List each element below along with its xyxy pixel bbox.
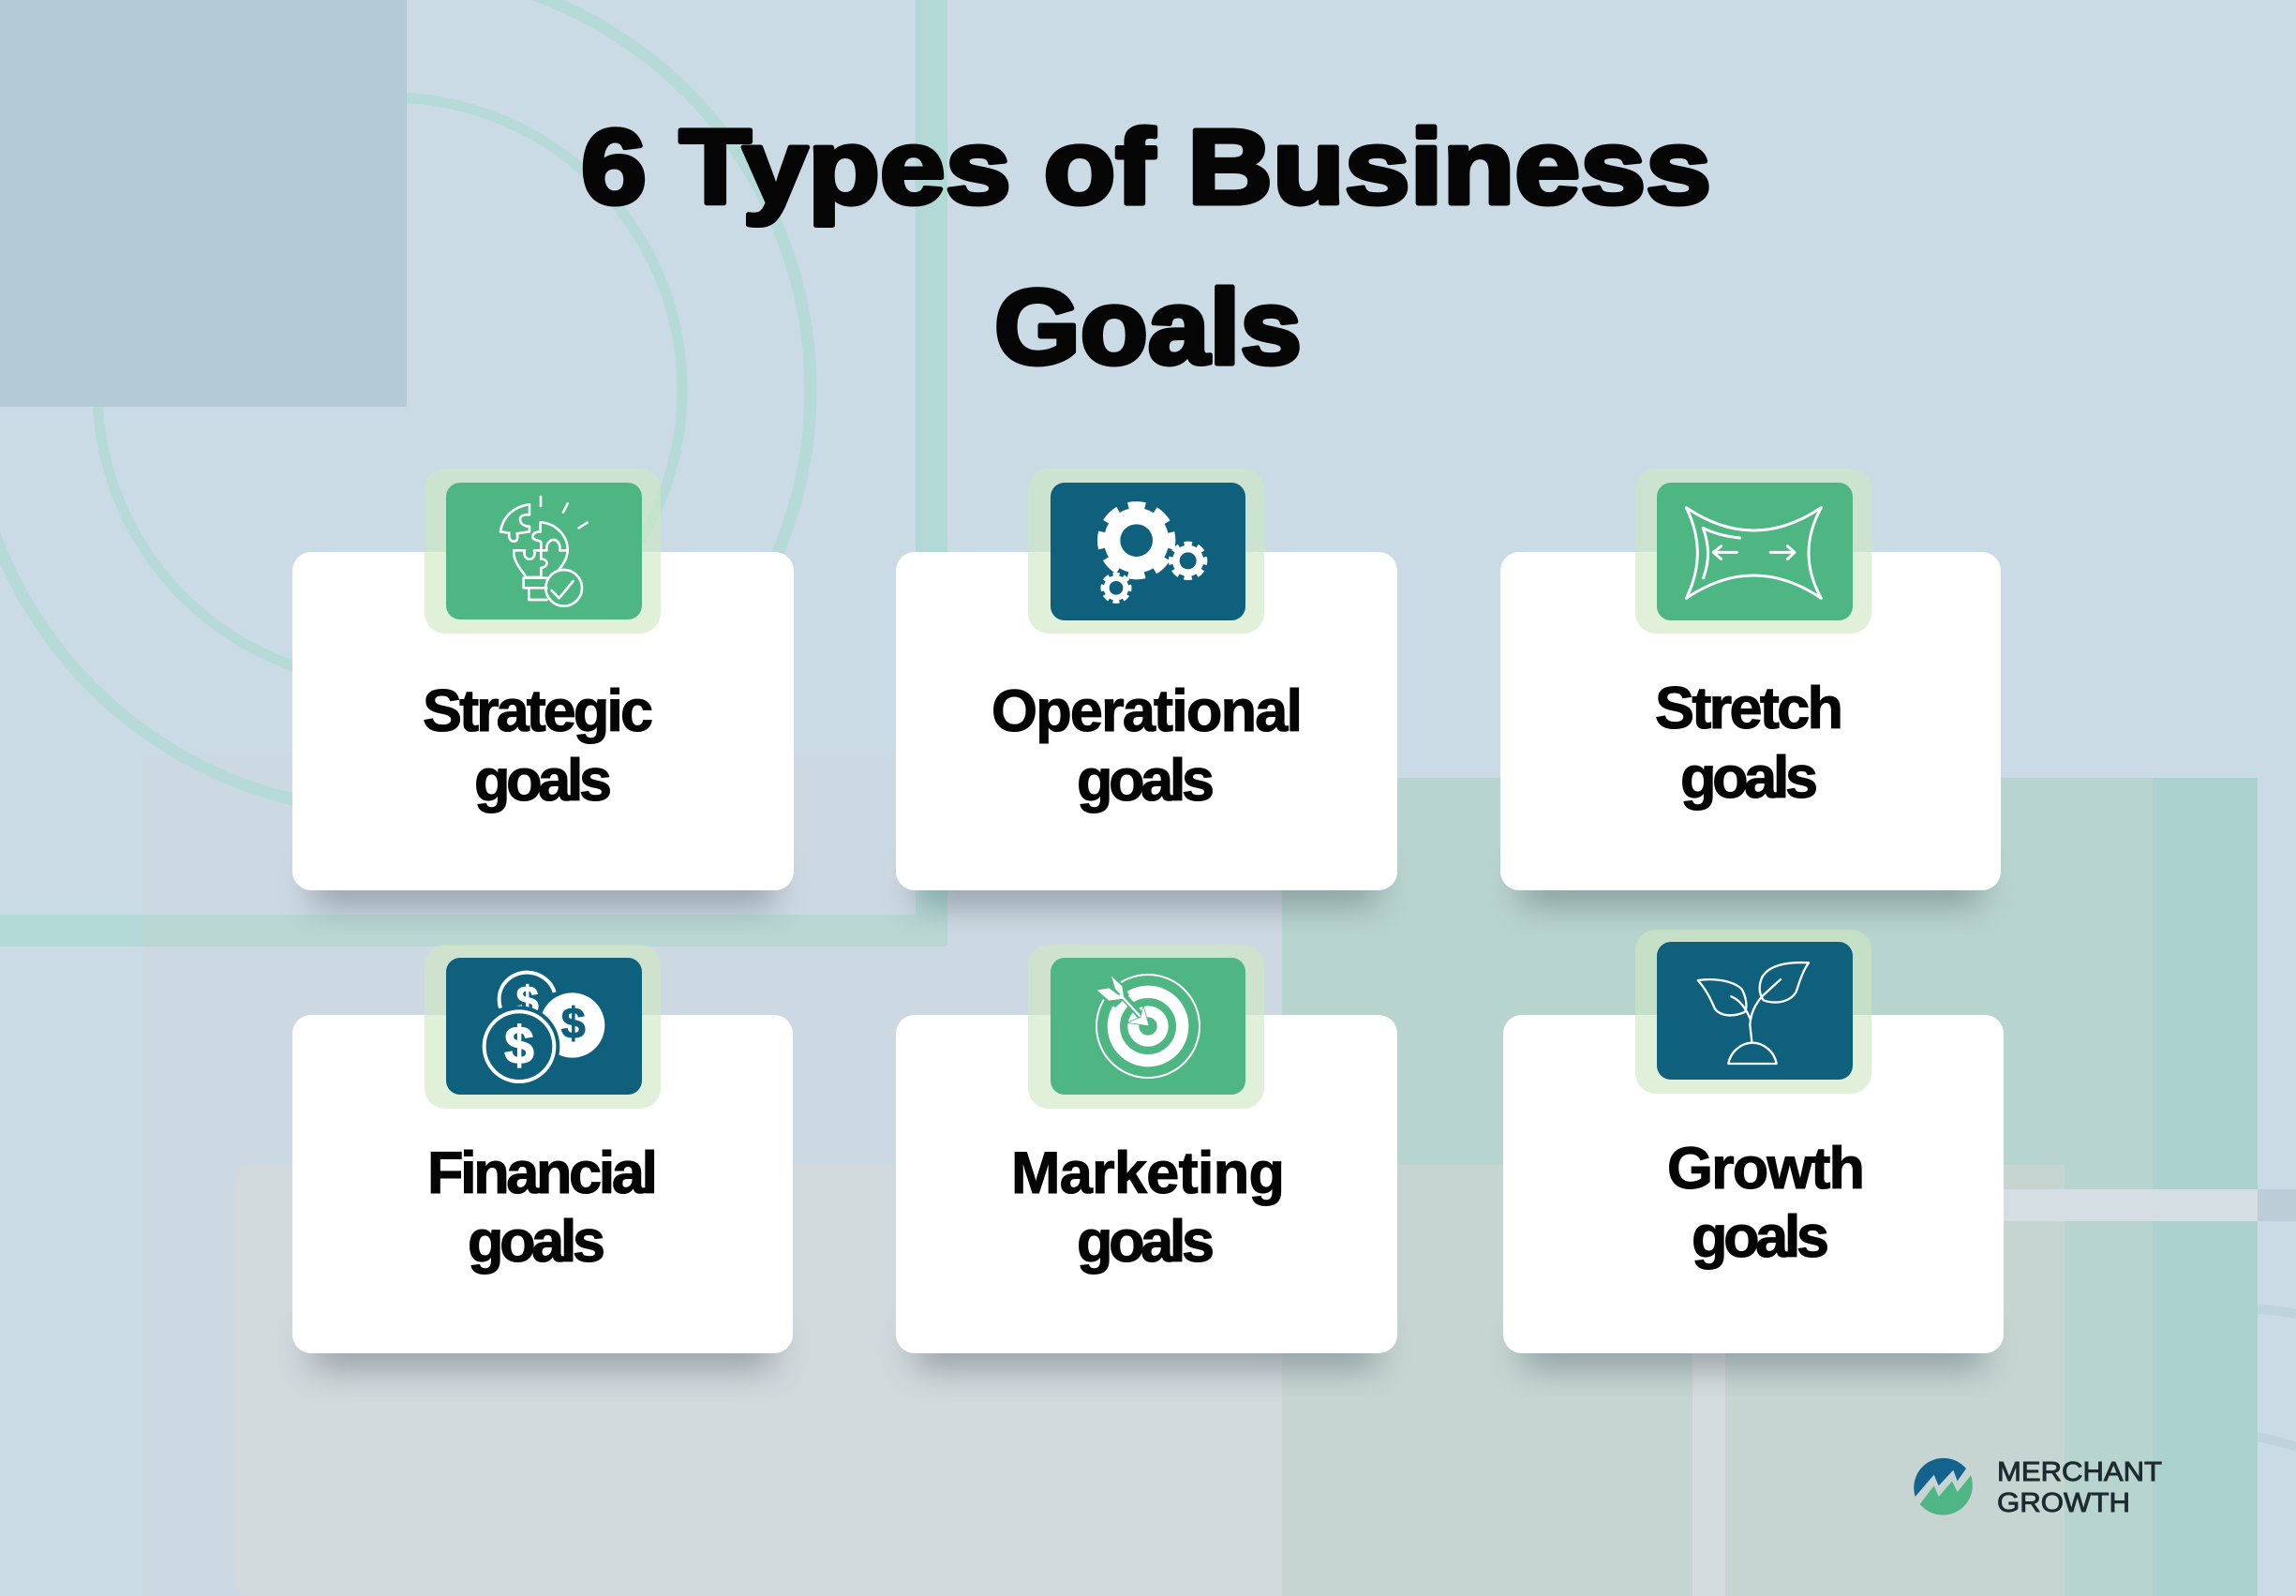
card label: operational goals: Operational	[991, 679, 1303, 744]
title: Goals	[994, 268, 1302, 386]
icon tile: coins	[425, 945, 661, 1109]
logo wordmark: MERCHANT	[1997, 1457, 2162, 1487]
card label: strategic goals: goals	[474, 748, 612, 813]
logo mark	[1914, 1458, 1973, 1515]
logo wordmark: GROWTH	[1997, 1488, 2130, 1518]
card label: operational goals: goals	[1077, 748, 1215, 813]
icon tile: gears	[1028, 469, 1264, 634]
panel: stretch goals	[1500, 469, 2001, 904]
icon tile: coins: $	[504, 1017, 534, 1076]
card label: operational goals	[991, 679, 1303, 813]
card label: marketing goals: Marketing	[1011, 1141, 1285, 1206]
icon tile: coins: $	[516, 979, 539, 1024]
card label: growth goals: Growth	[1667, 1136, 1865, 1201]
panel: marketing goals	[896, 945, 1397, 1367]
title	[581, 108, 1711, 386]
card label: stretch goals	[1655, 676, 1843, 811]
card label: growth goals: goals	[1692, 1204, 1829, 1270]
icon tile: target and arrow	[1028, 945, 1264, 1109]
title: 6 Types of Business	[581, 108, 1711, 226]
card label: strategic goals: Strategic	[423, 679, 653, 744]
panel: strategic goals	[292, 469, 794, 904]
panel: operational goals	[896, 469, 1397, 904]
card label: marketing goals	[1011, 1141, 1285, 1275]
card label: strategic goals	[423, 679, 653, 813]
icon tile: puzzle lightbulb	[425, 469, 661, 634]
panel: financial goals	[292, 945, 793, 1367]
card label: growth goals	[1667, 1136, 1865, 1270]
card label: financial goals: Financial	[427, 1141, 658, 1206]
card label: stretch goals: goals	[1680, 745, 1818, 811]
icon tile: coins: $	[561, 999, 586, 1048]
icon tile: stretched canvas	[1635, 469, 1871, 634]
card label: marketing goals: goals	[1077, 1209, 1215, 1275]
logo wordmark	[1997, 1457, 2162, 1518]
card label: financial goals	[427, 1141, 658, 1275]
icon tile: sprout	[1635, 930, 1871, 1094]
card label: stretch goals: Stretch	[1655, 676, 1843, 741]
card label: financial goals: goals	[468, 1209, 605, 1275]
logo: Merchant Growth	[1914, 1457, 2162, 1518]
panel: growth goals	[1503, 930, 2004, 1367]
